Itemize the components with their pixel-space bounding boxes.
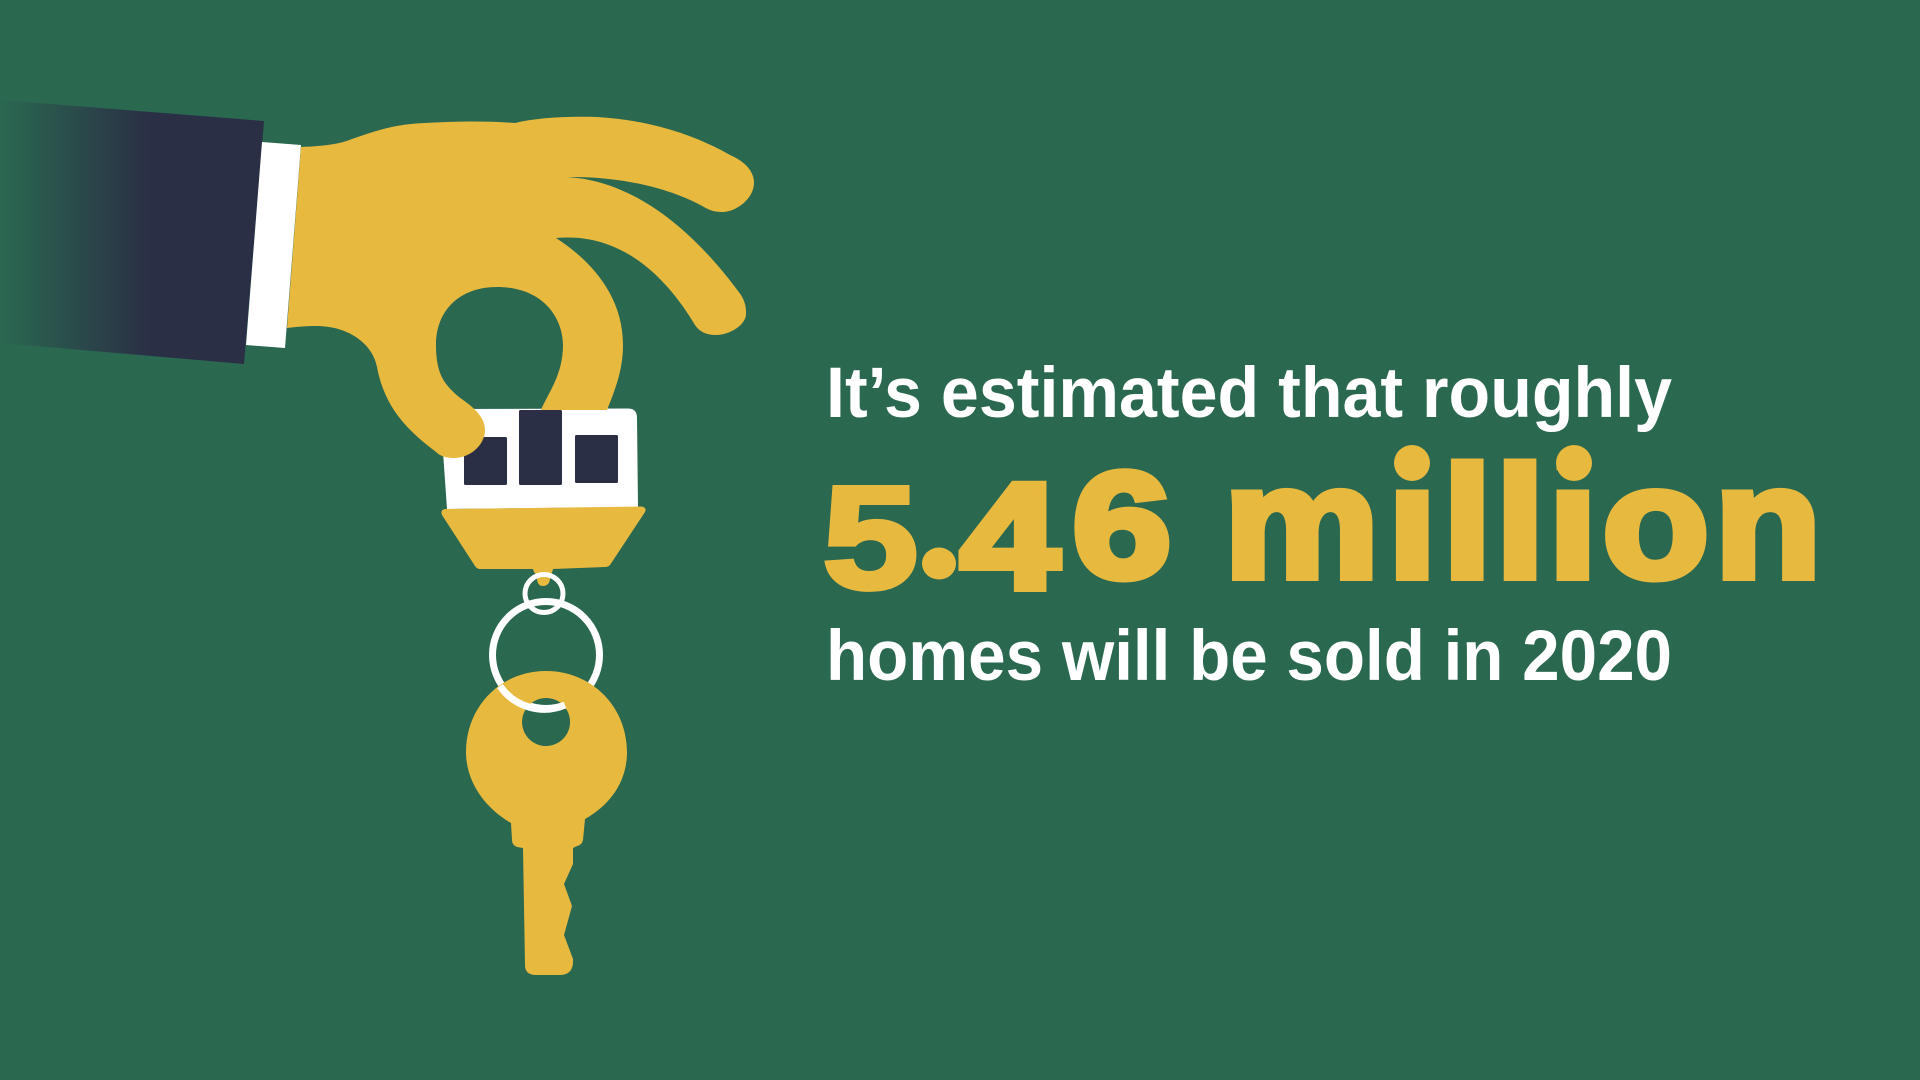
- statistic number: 6: [1073, 441, 1171, 609]
- small key ring: [525, 574, 563, 612]
- statistic number: .: [927, 508, 950, 586]
- illustration: hand holding house key: [0, 100, 754, 975]
- house wall: [440, 408, 638, 509]
- sleeve: [0, 100, 264, 364]
- shirt cuff: [246, 142, 301, 348]
- key ring overlap: [500, 686, 565, 709]
- window right: [575, 435, 618, 483]
- large key ring: [492, 602, 600, 708]
- number decimal point: [922, 548, 956, 580]
- window left: [464, 437, 507, 485]
- text: closing line: homes will be sold in 2020: [826, 617, 1672, 696]
- house base: [441, 506, 646, 586]
- key: [466, 671, 627, 975]
- statistic unit: million: [1224, 435, 1821, 611]
- window middle: [519, 410, 562, 485]
- hand: [287, 117, 754, 458]
- statistic number: 4: [961, 452, 1059, 620]
- unit letter dots: [1392, 445, 1594, 488]
- text: intro line: It’s estimated that roughly: [826, 354, 1672, 433]
- statistic: 5.46 million: [822, 435, 1821, 620]
- statistic number: 5: [822, 455, 918, 619]
- house keychain: [440, 408, 646, 586]
